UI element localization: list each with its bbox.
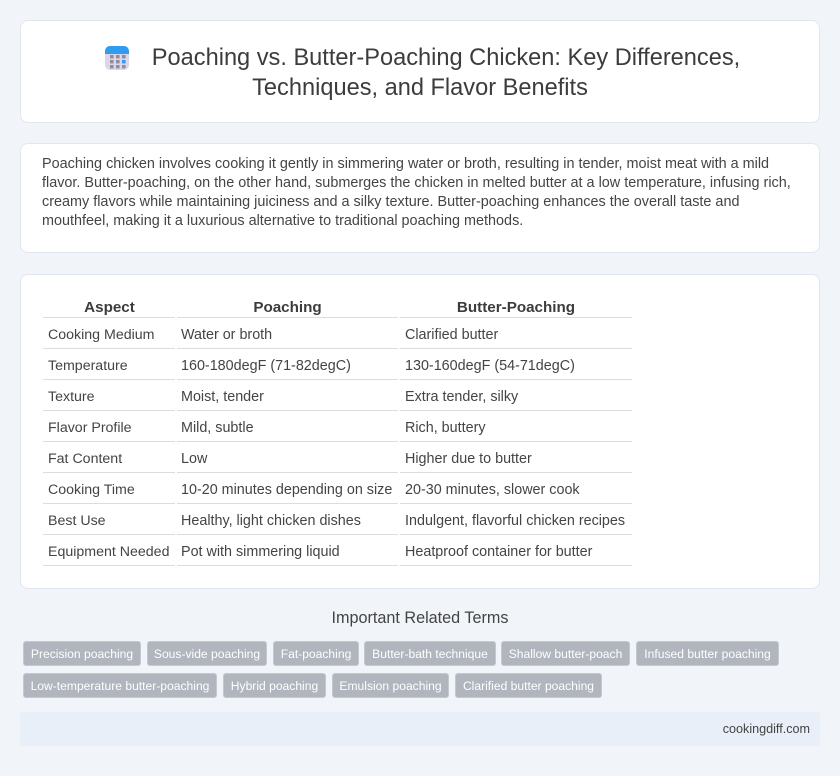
row: Best Use: Best Use: [48, 513, 106, 529]
row: Best Use: Indulgent, flavorful chicken recipes: [405, 513, 625, 529]
row: Flavor Profile: Mild, subtle: [181, 420, 254, 436]
row: Equipment Needed: Pot with simmering liquid: [181, 544, 340, 560]
icon: calendar: [105, 46, 129, 70]
row: Temperature: Temperature: [48, 358, 128, 374]
tag: Fat-poaching: [281, 647, 351, 661]
row: Flavor Profile: [48, 420, 486, 436]
intro text: flavor. Butter-poaching, on the other hand, submerges the chicken in melted butter at a low temperature, infusing rich,: [42, 175, 791, 191]
row: Best Use: [48, 513, 625, 529]
row: Temperature: 160-180degF (71-82degC): [181, 358, 351, 374]
tag: [455, 673, 602, 698]
title: Poaching vs. Butter-Poaching Chicken: Key Differences,: [152, 45, 740, 71]
tag: [332, 673, 449, 698]
tag: Emulsion poaching: [339, 679, 442, 693]
row: Best Use: Healthy, light chicken dishes: [181, 513, 361, 529]
row: Temperature: [48, 358, 575, 374]
intro text: [42, 156, 791, 229]
title: [152, 45, 740, 101]
intro text: creamy flavors while maintaining juiciness and a silky texture. Butter-poaching enhances the overall taste and: [42, 194, 739, 210]
tag: [223, 673, 326, 698]
row: Cooking Time: 10-20 minutes depending on size: [181, 482, 392, 498]
tag: Precision poaching: [31, 647, 133, 661]
footer credit: cookingdiff.com: [723, 722, 810, 736]
tag: Infused butter poaching: [644, 647, 771, 661]
tag: Sous-vide poaching: [154, 647, 260, 661]
table header: Butter-Poaching: Butter-Poaching: [457, 299, 575, 316]
row: Flavor Profile: Rich, buttery: [405, 420, 486, 436]
row: Temperature: 130-160degF (54-71degC): [405, 358, 575, 374]
row: Texture: Moist, tender: [181, 389, 264, 405]
tag: [273, 641, 359, 666]
row: Texture: Extra tender, silky: [405, 389, 518, 405]
tag: [364, 641, 496, 666]
row: Cooking Medium: Clarified butter: [405, 327, 498, 343]
heading: related terms: Important Related Terms: [332, 609, 508, 627]
panel: introduction: [20, 143, 820, 253]
row: Fat Content: [48, 451, 532, 467]
related term tags: [23, 641, 779, 698]
row: Cooking Medium: Cooking Medium: [48, 327, 154, 343]
intro text: Poaching chicken involves cooking it gently in simmering water or broth, resulting in tender, moist meat with a mild: [42, 156, 769, 172]
row: Cooking Medium: Water or broth: [181, 327, 272, 343]
table header: Poaching: Poaching: [253, 299, 322, 316]
row: Cooking Time: Cooking Time: [48, 482, 135, 498]
tag: [636, 641, 779, 666]
tag: [501, 641, 630, 666]
row: Cooking Medium: [48, 327, 498, 343]
row: Equipment Needed: Equipment Needed: [48, 544, 169, 560]
row: Fat Content: Higher due to butter: [405, 451, 532, 467]
intro text: mouthfeel, making it a luxurious alternative to traditional poaching methods.: [42, 213, 523, 229]
row: Flavor Profile: Flavor Profile: [48, 420, 132, 436]
row: Equipment Needed: Heatproof container for butter: [405, 544, 592, 560]
row: Texture: Texture: [48, 389, 95, 405]
tag: [23, 641, 141, 666]
tag: Butter-bath technique: [372, 647, 488, 661]
title: Techniques, and Flavor Benefits: [252, 75, 588, 101]
table header: Aspect: Aspect: [84, 299, 135, 316]
tag: Shallow butter-poach: [509, 647, 622, 661]
row: Cooking Time: [48, 482, 580, 498]
row: Cooking Time: 20-30 minutes, slower cook: [405, 482, 580, 498]
panel: comparison table: [20, 274, 820, 589]
tag: [147, 641, 267, 666]
tag: [23, 673, 217, 698]
header panel: [20, 20, 820, 123]
row: Texture: [48, 389, 518, 405]
tag: Low-temperature butter-poaching: [31, 679, 209, 693]
row: Fat Content: Low: [181, 451, 207, 467]
footer bar: [20, 712, 820, 746]
tag: Clarified butter poaching: [463, 679, 594, 693]
row: Equipment Needed: [48, 544, 592, 560]
row: Fat Content: Fat Content: [48, 451, 122, 467]
tag: Hybrid poaching: [231, 679, 318, 693]
